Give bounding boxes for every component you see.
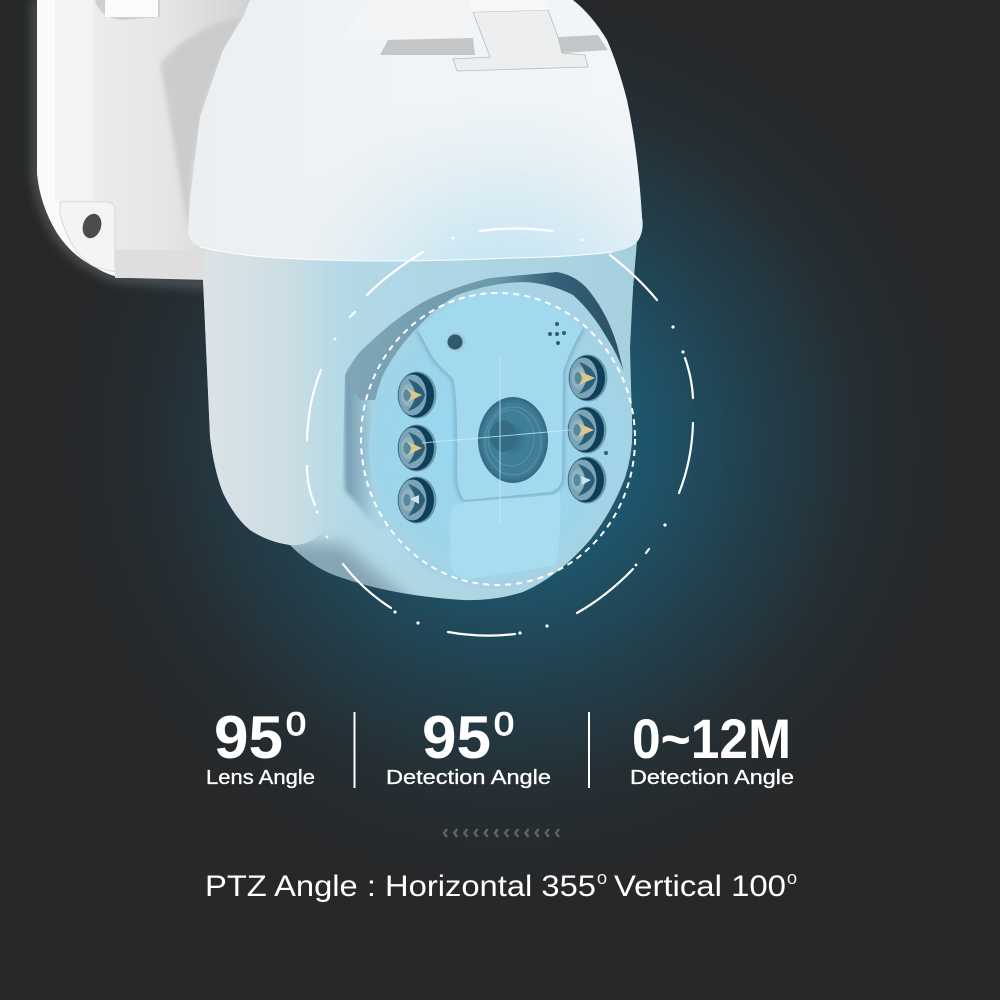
PTZ angle line: PTZ Angle : Horizontal 355 bbox=[205, 870, 596, 903]
main lens bbox=[478, 397, 548, 483]
stat: detection angle: Detection Angle bbox=[386, 767, 551, 789]
arc dots bbox=[316, 237, 685, 635]
outer rotation arcs bbox=[307, 228, 693, 636]
top mount tab shadow bbox=[380, 38, 475, 55]
sensor bbox=[446, 332, 466, 352]
central plate bbox=[418, 290, 583, 500]
screw hole bbox=[80, 211, 104, 241]
stat: detection range: Detection Angle bbox=[630, 767, 794, 789]
stat: detection angle: 0 bbox=[494, 706, 514, 742]
top mount tab bbox=[453, 10, 588, 71]
upper shell plate bbox=[340, 0, 473, 40]
PTZ angle line: Vertical 100 bbox=[614, 870, 786, 903]
stat: lens angle: 95 bbox=[214, 704, 283, 771]
right LED bottom bbox=[568, 456, 606, 504]
divider bbox=[588, 712, 590, 788]
status dot bbox=[604, 451, 608, 455]
wall bracket bbox=[37, 0, 250, 284]
left LED top bbox=[398, 372, 436, 418]
face details bbox=[398, 290, 608, 579]
front face disc bbox=[369, 282, 632, 589]
dome housing bbox=[180, 0, 660, 270]
camera illustration bbox=[37, 0, 660, 610]
left LED bottom bbox=[398, 476, 436, 524]
PIR window pad bbox=[450, 492, 560, 579]
stat: detection angle: 95 bbox=[422, 704, 491, 771]
microphone dots bbox=[548, 322, 566, 345]
stat: lens angle bbox=[206, 704, 315, 789]
crosshair bbox=[422, 355, 570, 525]
right LED middle bbox=[568, 406, 606, 454]
divider bbox=[354, 712, 356, 788]
PTZ angle line bbox=[205, 870, 797, 903]
side flap bbox=[203, 240, 640, 545]
lower shell shading bbox=[290, 535, 412, 594]
chevron row bbox=[444, 829, 559, 837]
PTZ angle line: 0 bbox=[597, 871, 607, 888]
dashed scan circle bbox=[361, 293, 635, 585]
stat: detection angle bbox=[386, 704, 551, 789]
lower camera body bbox=[200, 240, 640, 610]
right LED top bbox=[568, 354, 608, 402]
stat: lens angle: 0 bbox=[286, 706, 306, 742]
left recess shading bbox=[342, 364, 384, 526]
dark recess wedge bbox=[345, 272, 627, 400]
stat: lens angle: Lens Angle bbox=[206, 767, 315, 789]
left LED middle bbox=[398, 424, 436, 472]
PTZ angle line: 0 bbox=[787, 871, 797, 888]
stat: detection range: 0~12M bbox=[632, 707, 791, 770]
